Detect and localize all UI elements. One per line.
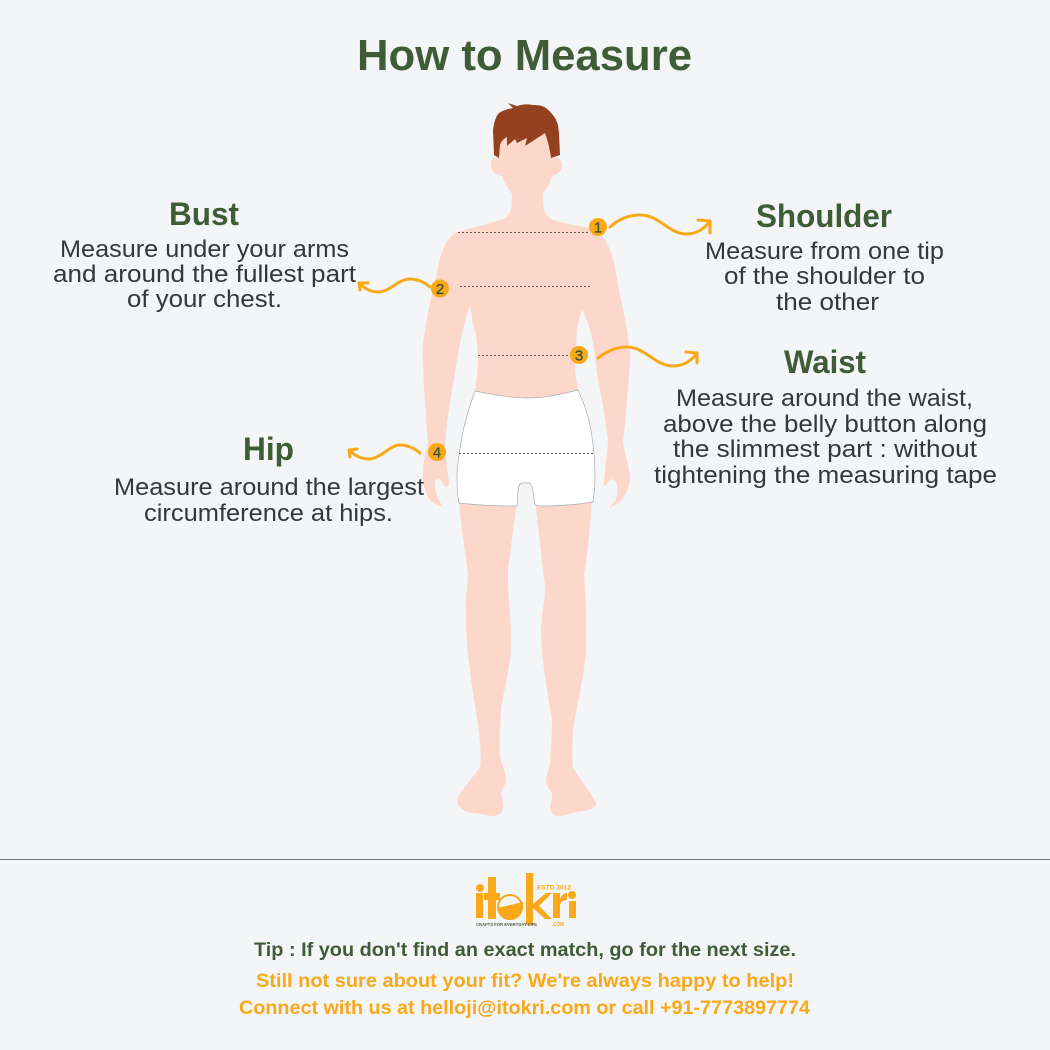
footer divider <box>0 858 1050 860</box>
text block: waist: the slimmest part : without <box>673 436 977 463</box>
hair <box>493 103 560 158</box>
text block: shoulder: the other <box>776 289 879 316</box>
text block: bust: Bust <box>169 196 239 232</box>
figure: human body <box>423 103 630 816</box>
text block: bust <box>53 196 356 313</box>
marker 2: 2 <box>436 281 444 298</box>
help text: Still not sure about your fit? We're always happy to help! <box>256 971 794 992</box>
marker 3 <box>570 346 588 364</box>
arrow: hip <box>349 445 420 459</box>
head and ears <box>491 118 562 194</box>
text block: hip: Measure around the largest <box>114 474 424 501</box>
logo: itokri: .COM <box>552 922 564 928</box>
marker 1: 1 <box>594 220 602 236</box>
torso and arms <box>423 190 630 508</box>
text block: bust: Measure under your arms <box>60 236 349 263</box>
measure line: waist <box>478 354 572 356</box>
text block: waist: Waist <box>784 344 866 380</box>
arrow: waist <box>598 347 697 366</box>
measure line: shoulder <box>458 232 590 234</box>
text block: waist: Measure around the waist, <box>676 385 973 412</box>
text block: shoulder <box>705 198 944 316</box>
logo: itokri: CRAFTS FOR EVERYDAY LIFE <box>476 922 537 927</box>
measure line: hip <box>459 452 593 454</box>
marker 3: 3 <box>575 348 583 364</box>
contact text: Connect with us at helloji@itokri.com or call +91-7773897774 <box>239 998 810 1019</box>
text block: waist: tightening the measuring tape <box>654 462 997 489</box>
marker 1 <box>589 218 607 236</box>
arrow: shoulder <box>610 215 710 234</box>
right leg <box>535 500 596 816</box>
title: How to Measure <box>357 31 692 80</box>
logo: itokri <box>476 873 576 928</box>
text block: hip <box>114 431 424 527</box>
marker 4: 4 <box>433 444 441 462</box>
text block: waist: above the belly button along <box>663 411 987 438</box>
measure line: bust <box>460 286 590 288</box>
marker 4 <box>428 443 446 462</box>
text block: shoulder: Shoulder <box>756 198 892 234</box>
text block: bust: of your chest. <box>127 286 282 313</box>
tip text: Tip : If you don't find an exact match, go for the next size. <box>254 940 796 961</box>
arrow: bust <box>359 279 430 292</box>
text block: bust: and around the fullest part <box>53 261 356 288</box>
logo: itokri: ESTD 2012 <box>537 884 571 892</box>
marker 2 <box>431 280 449 298</box>
left leg <box>457 500 517 816</box>
text block: shoulder: of the shoulder to <box>724 263 925 290</box>
text block: waist <box>654 344 997 489</box>
shorts <box>457 390 595 506</box>
text block: hip: circumference at hips. <box>144 500 393 527</box>
text block: hip: Hip <box>243 431 294 467</box>
text block: shoulder: Measure from one tip <box>705 238 944 265</box>
